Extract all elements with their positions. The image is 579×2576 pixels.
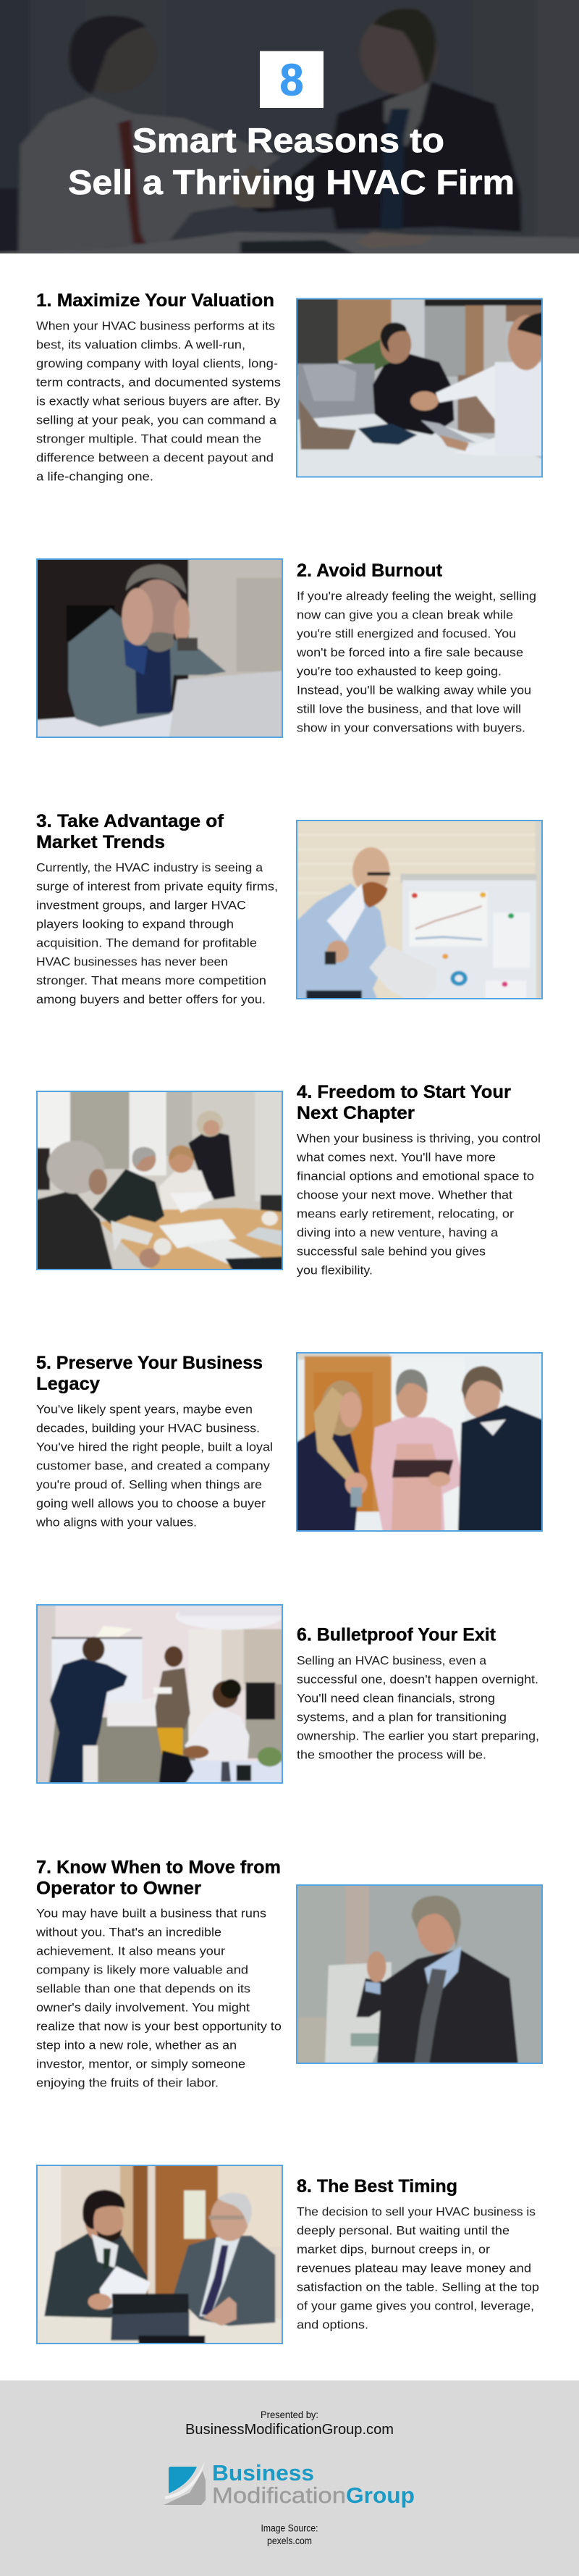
body text: company is likely more valuable and (36, 1964, 248, 1977)
body text: investment groups, and larger HVAC (36, 899, 246, 912)
photo: two businessmen with laptop (29, 2158, 290, 2351)
heading (36, 1353, 263, 1394)
hero banner (0, 0, 579, 263)
body text: systems, and a plan for transitioning (297, 1711, 507, 1724)
body text: stronger. That means more competition (36, 975, 266, 988)
body text: difference between a decent payout and (36, 452, 274, 465)
body text: If you're already feeling the weight, selling (297, 590, 536, 603)
body text: growing company with loyal clients, long- (36, 358, 278, 371)
website: BusinessModificationGroup.com (185, 2421, 394, 2438)
body text: who aligns with your values. (35, 1516, 197, 1530)
body text: Currently, the HVAC industry is seeing a (36, 862, 263, 875)
heading: Market Trends (36, 832, 165, 852)
body text: and options. (297, 2319, 368, 2332)
body text (297, 1654, 539, 1761)
photo: businessman speaking (288, 1878, 551, 2071)
logo wordmark (212, 2460, 415, 2508)
body text: surge of interest from private equity firms, (36, 881, 278, 894)
presented by label: Presented by: (261, 2409, 318, 2420)
panel: reason 5 (35, 1346, 551, 1538)
body text: ownership. The earlier you start preparing, (297, 1729, 539, 1742)
panel: reason 3 (36, 811, 551, 1007)
body text: enjoying the fruits of their labor. (36, 2077, 219, 2090)
body text: successful one, doesn't happen overnight. (297, 1673, 538, 1686)
body text: without you. That's an incredible (35, 1926, 221, 1939)
heading: 4. Freedom to Start Your (297, 1082, 511, 1102)
body text (36, 862, 278, 1007)
panel: reason 6 (29, 1598, 539, 1790)
body text: You may have built a business that runs (36, 1908, 266, 1921)
body text: HVAC businesses has never been (36, 956, 228, 969)
body text: deeply personal. But waiting until the (297, 2225, 510, 2238)
body text: Instead, you'll be walking away while you (297, 684, 531, 697)
panel: reason 2 (29, 552, 536, 744)
body text: choose your next move. Whether that (297, 1189, 512, 1202)
body text: won't be forced into a fire sale because (296, 646, 523, 659)
body text: owner's daily involvement. You might (36, 2002, 250, 2015)
body text: revenues plateau may leave money and (297, 2262, 531, 2275)
image source: pexels.com (267, 2535, 312, 2546)
body text (296, 1133, 541, 1277)
body text: you're proud of. Selling when things are (36, 1479, 262, 1492)
title: Sell a Thriving HVAC Firm (68, 163, 515, 201)
panel: reason 4 (29, 1082, 541, 1277)
number badge: 8 (279, 55, 304, 106)
body text: a life-changing one. (36, 471, 153, 484)
number badge (260, 51, 324, 108)
photo: team at whiteboard (29, 1598, 290, 1790)
body text: stronger multiple. That could mean the (36, 433, 261, 446)
logo icon (164, 2461, 206, 2505)
body text: selling at your peak, you can command a (36, 414, 277, 427)
body text: diving into a new venture, having a (297, 1227, 499, 1240)
heading: 6. Bulletproof Your Exit (297, 1625, 496, 1645)
body text: you flexibility. (297, 1264, 373, 1277)
logo wordmark: Modification (212, 2483, 346, 2508)
body text: realize that now is your best opportunity to (36, 2021, 282, 2034)
title (68, 121, 515, 201)
body text: of your game gives you control, leverage, (297, 2300, 534, 2313)
body text: market dips, burnout creeps in, or (297, 2244, 491, 2257)
body text: Selling an HVAC business, even a (297, 1654, 487, 1667)
body text: now can give you a clean break while (297, 608, 513, 621)
body text: means early retirement, relocating, or (297, 1208, 515, 1221)
body text: You've likely spent years, maybe even (36, 1404, 253, 1417)
body text (297, 2206, 539, 2332)
heading: Operator to Owner (36, 1879, 201, 1899)
body text: is exactly what serious buyers are after. By (36, 395, 281, 408)
photo: man presenting at whiteboard (288, 813, 551, 1006)
body text: step into a new role, whether as an (36, 2039, 237, 2052)
hero photo: handshake (0, 0, 579, 253)
image source (261, 2523, 318, 2546)
body text: The decision to sell your HVAC business is (297, 2206, 536, 2219)
photo: team meeting at table (29, 1084, 290, 1277)
heading (36, 1857, 281, 1899)
body text: the smoother the process will be. (297, 1748, 486, 1761)
body text: acquisition. The demand for profitable (36, 937, 257, 950)
photo: stressed man at laptop (29, 552, 290, 744)
panel: reason 8 (29, 2158, 539, 2351)
body text: financial options and emotional space to (297, 1170, 534, 1183)
body text (35, 1908, 282, 2090)
heading: 2. Avoid Burnout (297, 561, 443, 581)
heading: Legacy (36, 1374, 100, 1394)
footer (0, 2380, 579, 2576)
logo wordmark: Business (212, 2460, 314, 2485)
body text: customer base, and created a company (36, 1460, 271, 1473)
heading (36, 811, 224, 852)
heading (297, 1082, 511, 1123)
body text (296, 590, 536, 734)
logo wordmark: Group (346, 2483, 415, 2508)
body text: sellable than one that depends on its (36, 1983, 250, 1996)
body text: successful sale behind you gives (297, 1246, 486, 1259)
heading: 5. Preserve Your Business (36, 1353, 263, 1373)
body text: you're too exhausted to keep going. (297, 665, 502, 678)
body text: among buyers and better offers for you. (36, 994, 266, 1007)
panel: reason 1 (36, 290, 551, 485)
heading: 8. The Best Timing (297, 2176, 457, 2197)
body text (35, 1404, 273, 1530)
body text: satisfaction on the table. Selling at the top (297, 2281, 539, 2294)
photo: three colleagues with tablet (288, 1346, 551, 1538)
body text: You've hired the right people, built a loyal (36, 1441, 273, 1454)
body text: decades, building your HVAC business. (36, 1422, 260, 1435)
body text: players looking to expand through (36, 918, 234, 931)
body text: you're still energized and focused. You (297, 627, 516, 640)
body text (36, 320, 281, 484)
body text: show in your conversations with buyers. (297, 721, 525, 734)
heading: 3. Take Advantage of (36, 811, 224, 831)
heading: Next Chapter (297, 1103, 415, 1123)
body text: achievement. It also means your (36, 1945, 226, 1958)
body text: what comes next. You'll have more (296, 1151, 496, 1165)
logo (164, 2460, 415, 2508)
heading: 1. Maximize Your Valuation (36, 290, 274, 311)
body text: When your business is thriving, you control (297, 1133, 541, 1146)
photo: two men shaking hands at table (288, 291, 551, 485)
body text: going well allows you to choose a buyer (36, 1498, 266, 1511)
body text: term contracts, and documented systems (36, 377, 281, 390)
body text: best, its valuation climbs. A well-run, (36, 339, 245, 352)
body text: You'll need clean financials, strong (297, 1692, 495, 1705)
body text: When your HVAC business performs at its (36, 320, 275, 333)
heading: 7. Know When to Move from (36, 1857, 281, 1877)
body text: investor, mentor, or simply someone (36, 2058, 245, 2071)
panel: reason 7 (35, 1857, 551, 2090)
title: Smart Reasons to (132, 121, 444, 159)
image source: Image Source: (261, 2523, 318, 2533)
body text: still love the business, and that love will (297, 702, 521, 716)
